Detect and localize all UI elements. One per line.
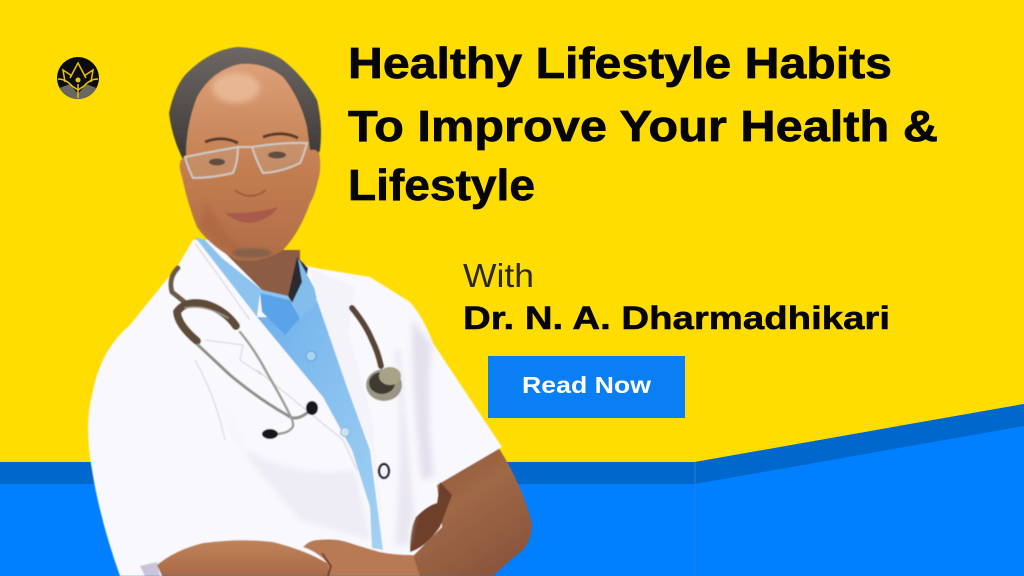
tucked hand [410,482,452,552]
coat lapel lines [195,243,357,470]
stethoscope tubes [171,268,381,434]
neck dark shadow [288,257,308,316]
lab coat [88,240,502,576]
neck [222,250,300,310]
hair [169,47,321,170]
title [348,39,938,210]
chin shadow [232,248,272,258]
title: To Improve Your Health & [348,102,938,151]
hand [303,539,420,576]
shirt collar left [195,237,300,318]
icon: lotus logo [57,57,99,99]
text: With: With [463,257,534,294]
ear tips [262,401,318,439]
eyes [209,152,286,166]
coat button [379,464,389,478]
title: Lifestyle [348,161,535,210]
mouth [225,207,278,223]
doctor portrait [88,47,532,576]
eyebrows [205,134,298,143]
shirt collar right [292,258,317,318]
shirt buttons [306,351,350,436]
shirt front [257,300,383,550]
nose [235,190,266,196]
coat lapel right [310,268,385,548]
sleeve hem [140,562,160,576]
cheek shadow [200,200,245,254]
button: Read Now [488,356,685,418]
text: doctor name: Dr. N. A. Dharmadhikari [463,300,890,336]
coat shading [220,400,370,540]
title: Healthy Lifestyle Habits [348,39,892,88]
forehead highlight [212,73,260,103]
button: Read Now: Read Now [522,372,651,398]
stethoscope chest piece [366,367,402,401]
crossed forearm [157,540,332,576]
face [180,64,320,261]
glasses [185,143,307,178]
right arm [330,440,532,576]
background: blue angled band [0,404,1024,576]
